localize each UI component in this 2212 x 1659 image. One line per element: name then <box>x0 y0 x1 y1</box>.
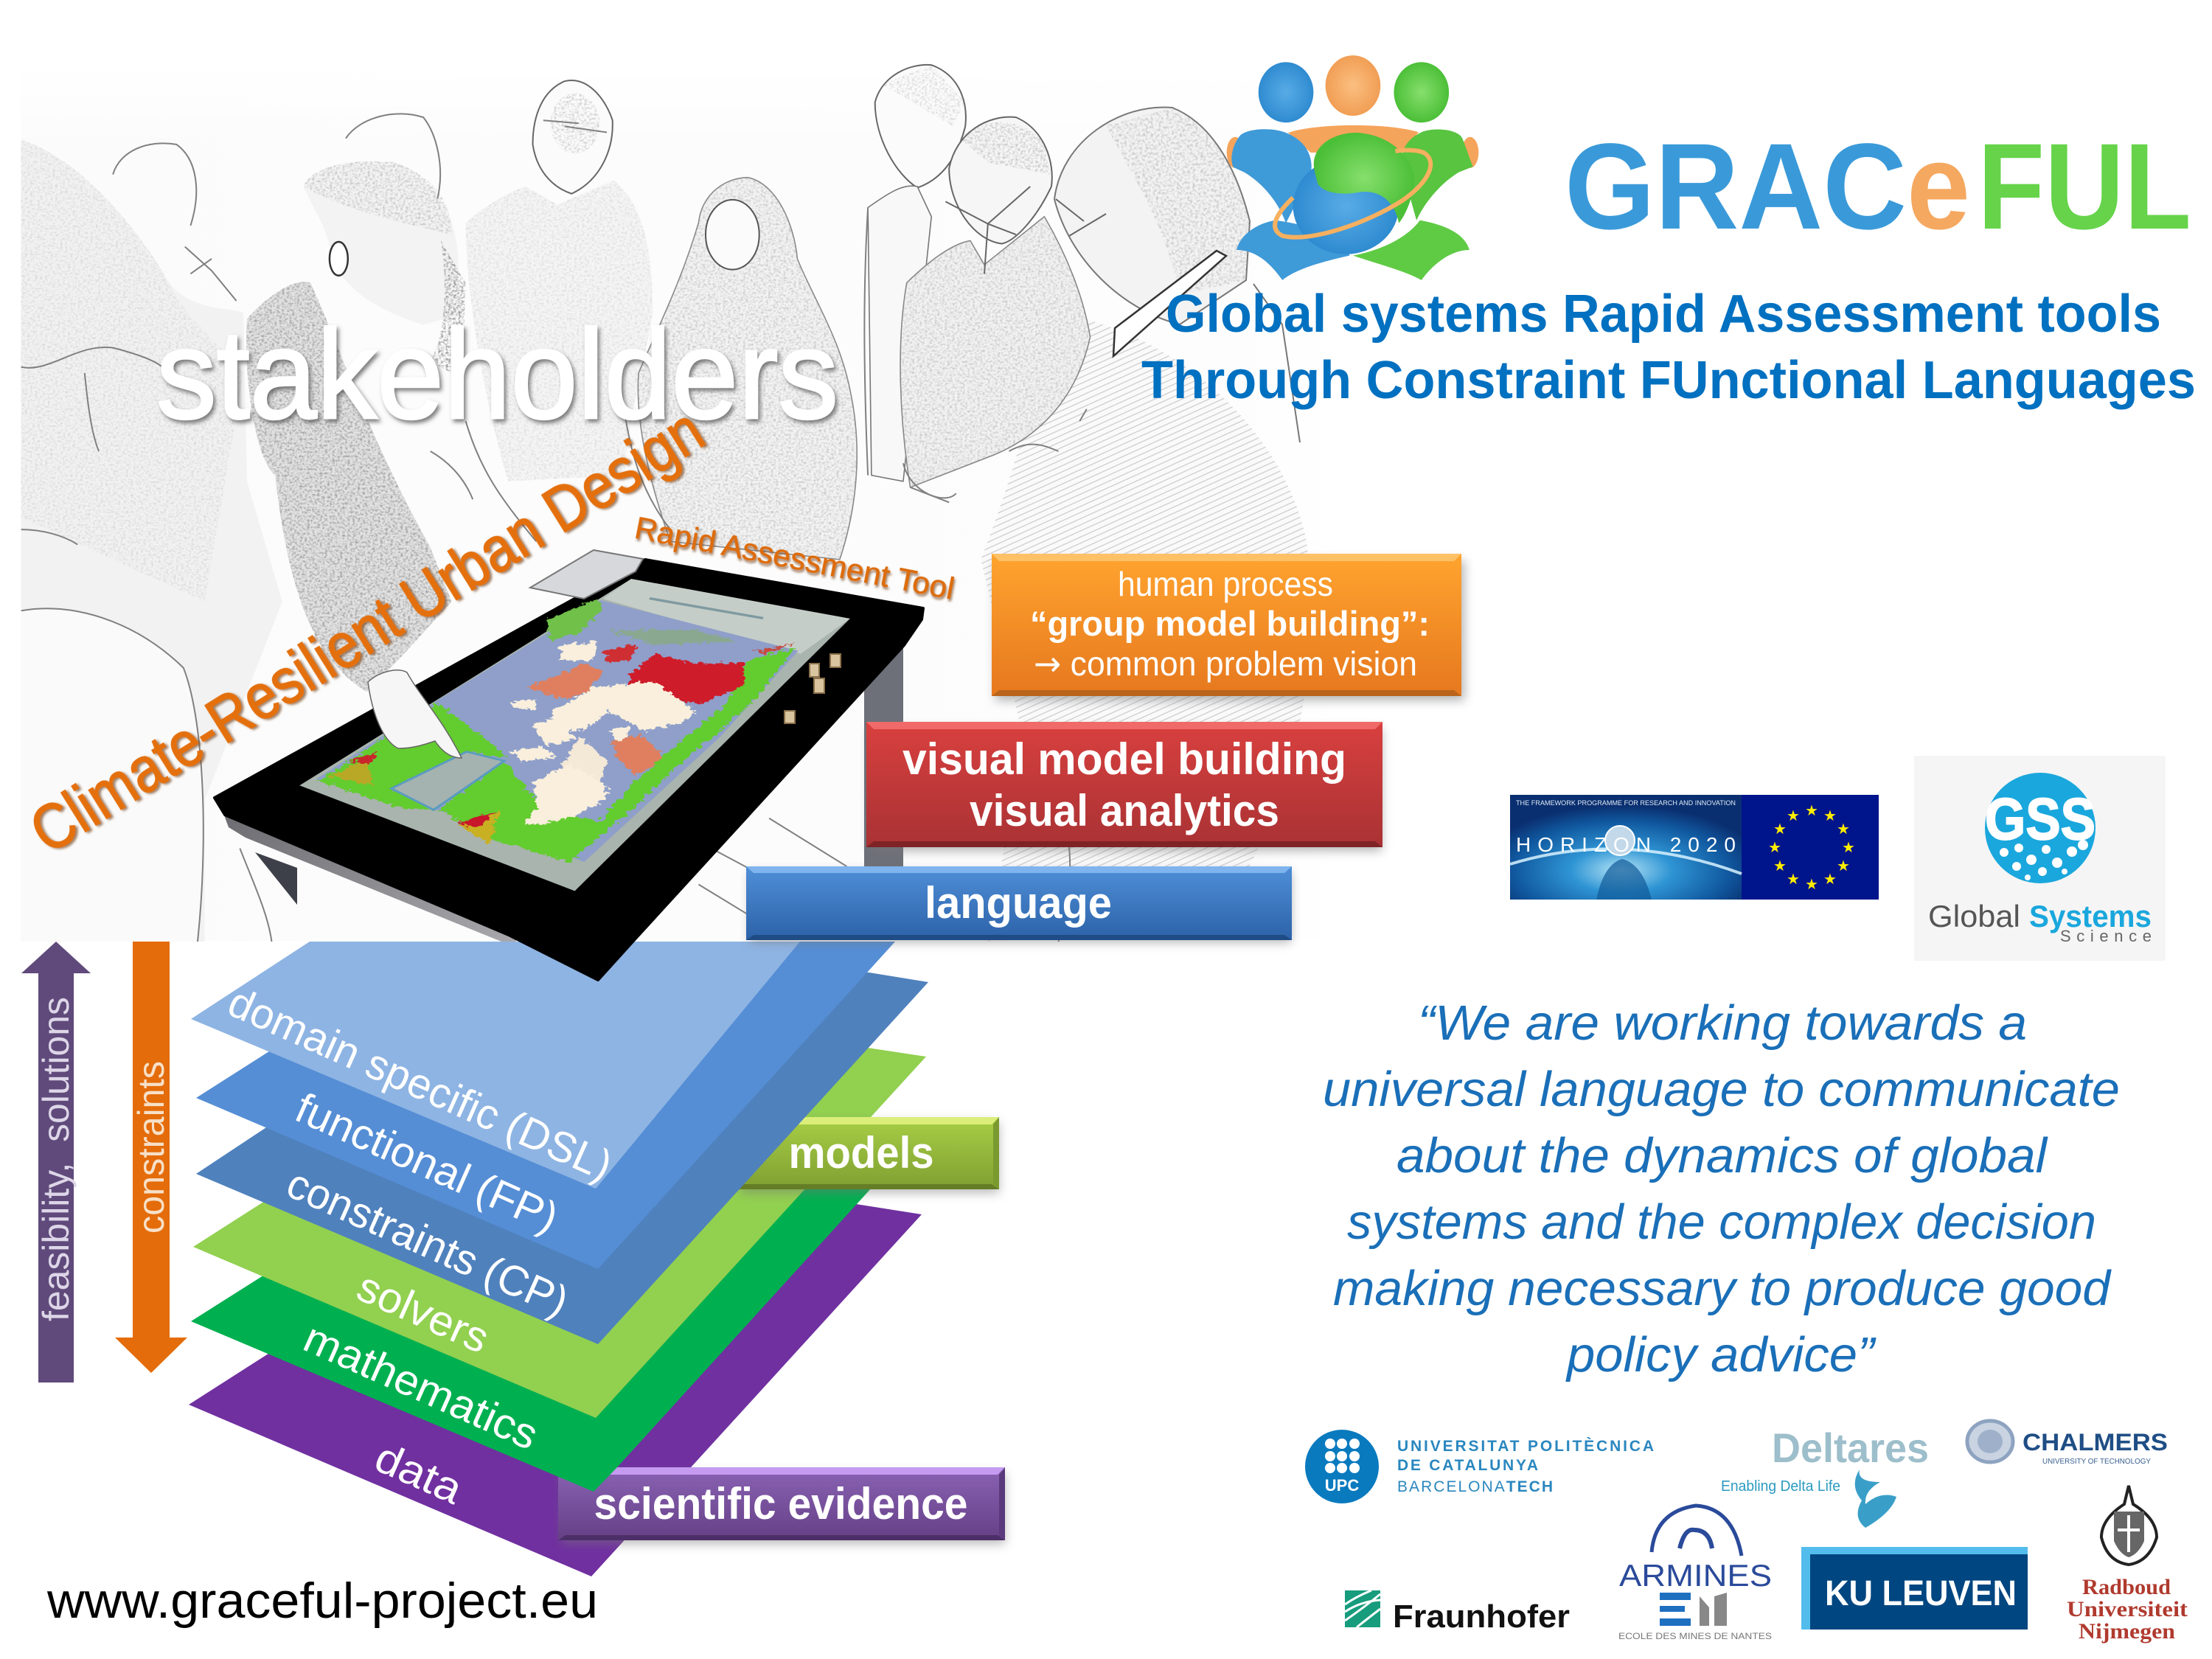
quote: universal language to communicate <box>1323 1062 2120 1117</box>
label: functional (FP): functional (FP) <box>288 1084 566 1242</box>
quote: systems and the complex decision <box>1347 1194 2096 1250</box>
label: data: data <box>368 1433 470 1514</box>
text: constraints: constraints <box>131 1061 172 1234</box>
text: visual model building: visual model building <box>902 734 1346 784</box>
heading: stakeholders: stakeholders <box>156 304 838 445</box>
text: group model building: “group model building”: <box>1030 604 1430 643</box>
photo: stakeholders pencil sketch background <box>21 65 1340 942</box>
layer: mathematics <box>191 1032 924 1492</box>
text: feasibility, solutions: feasibility, solutions <box>35 997 77 1321</box>
logo: Horizon 2020: ★ <box>1773 858 1787 874</box>
logo: Chalmers <box>1967 1421 2168 1466</box>
title <box>1141 285 2196 410</box>
logo: Horizon 2020: ★ <box>1787 872 1800 888</box>
label: solvers: solvers <box>350 1262 496 1363</box>
label: mathematics: mathematics <box>296 1313 545 1459</box>
text: models: models <box>789 1128 933 1178</box>
paper on table <box>530 550 643 599</box>
layer: solvers <box>193 995 926 1418</box>
layer: constraints <box>196 959 928 1344</box>
logo: Horizon 2020: ★ <box>1768 840 1781 856</box>
heading: Climate-Resilient Urban Design: Climate-Resilient Urban Design <box>18 394 716 867</box>
logo: Horizon 2020: ★ <box>1805 877 1818 893</box>
table top <box>215 560 923 980</box>
logo: Global Systems Science: GSS <box>1985 786 2096 852</box>
layer: domain specific <box>191 942 800 1189</box>
table with interactive map <box>215 550 923 980</box>
text: visual analytics: visual analytics <box>970 786 1279 835</box>
map screen <box>299 579 850 891</box>
logo: Radboud: Nijmegen <box>2079 1619 2175 1644</box>
logo: Global Systems Science: Science <box>2060 927 2152 945</box>
logo: UPC: UNIVERSITAT POLITÈCNICA <box>1397 1438 1654 1455</box>
logo: Horizon 2020: ★ <box>1773 821 1787 838</box>
logo: Global Systems Science: Global <box>1928 899 2020 933</box>
table silver edge <box>221 807 516 942</box>
logo: Horizon 2020 <box>1510 795 1879 900</box>
stack of language layers <box>189 942 1005 1576</box>
quote: “We are working towards a <box>1418 995 2027 1051</box>
box: human process <box>992 554 1464 700</box>
logo: Horizon 2020: ★ <box>1787 808 1800 824</box>
table left leg <box>255 852 297 905</box>
logo: Armines: ECOLE DES MINES DE NANTES <box>1618 1631 1772 1641</box>
logo: UPC <box>1305 1430 1654 1503</box>
title: Global systems Rapid Assessment tools <box>1166 285 2161 344</box>
logo: Deltares <box>1721 1425 1929 1528</box>
logo: Horizon 2020: ★ <box>1823 808 1837 824</box>
text: common problem vision: → common problem vision <box>1034 644 1417 684</box>
pointing hand <box>368 670 462 758</box>
logo: Global Systems Science <box>1914 756 2166 961</box>
text: human process: human process <box>1118 565 1333 603</box>
box: language <box>746 866 1292 942</box>
logo: Horizon 2020: HORIZON 2020 <box>1516 833 1736 856</box>
arrow: feasibility, solutions <box>21 942 91 1382</box>
box: visual model building <box>866 722 1382 851</box>
logo: Armines: ARMINES <box>1619 1558 1772 1593</box>
logo: Chalmers: UNIVERSITY OF TECHNOLOGY <box>2042 1458 2151 1466</box>
quote <box>1323 995 2120 1382</box>
logo: UPC: UPC <box>1325 1476 1359 1495</box>
logo wordmark: GRAC: GRAC <box>1565 119 1907 255</box>
logo: Fraunhofer: Fraunhofer <box>1393 1599 1570 1635</box>
logo: Horizon 2020: ★ <box>1805 803 1818 819</box>
logo: Armines <box>1618 1506 1772 1641</box>
quote: policy advice” <box>1565 1327 1877 1382</box>
layer: functional <box>196 942 895 1269</box>
logo wordmark: FUL: FUL <box>1978 119 2191 255</box>
logo: Fraunhofer <box>1345 1590 1570 1635</box>
logo: Horizon 2020: ★ <box>1823 872 1837 888</box>
logo: GRACeFUL emblem <box>1227 55 1478 280</box>
logo: UPC: BARCELONATECH <box>1397 1478 1553 1495</box>
quote: making necessary to produce good <box>1333 1261 2112 1316</box>
layer: data <box>189 1106 922 1576</box>
wooden cubes <box>785 654 841 723</box>
logo: KU Leuven <box>1801 1547 2028 1630</box>
logo: Chalmers: CHALMERS <box>2023 1429 2168 1455</box>
logo: Radboud: Radboud <box>2082 1575 2171 1599</box>
logo: Horizon 2020: ★ <box>1842 840 1855 856</box>
logo: UPC: DE CATALUNYA <box>1397 1457 1538 1474</box>
label: Rapid Assessment Tool: Rapid Assessment Tool <box>632 510 957 606</box>
logo: KU Leuven: KU LEUVEN <box>1825 1574 2017 1613</box>
box: scientific evidence <box>558 1467 1005 1544</box>
logo: Radboud <box>2067 1486 2188 1644</box>
logo: Horizon 2020: ★ <box>1837 821 1850 838</box>
quote: about the dynamics of global <box>1397 1128 2048 1183</box>
logo: Deltares: Deltares <box>1772 1425 1929 1471</box>
label: domain specific (DSL): domain specific (DSL) <box>221 978 619 1190</box>
logo: Radboud: Universiteit <box>2067 1597 2188 1621</box>
text: language: language <box>925 878 1112 928</box>
label: constraints (CP): constraints (CP) <box>279 1159 575 1326</box>
table right leg <box>864 634 903 866</box>
arrow: constraints <box>115 942 187 1373</box>
logo: Horizon 2020: ★ <box>1837 858 1850 874</box>
logo: Global Systems Science: Systems <box>2029 899 2152 933</box>
text: scientific evidence: scientific evidence <box>594 1479 967 1528</box>
website url: www.graceful-project.eu <box>46 1573 598 1629</box>
logo: Deltares: Enabling Delta Life <box>1721 1478 1840 1495</box>
logo wordmark: e: e <box>1907 119 1970 255</box>
title: Through Constraint FUnctional Languages <box>1141 351 2196 410</box>
logo: Horizon 2020: THE FRAMEWORK PROGRAMME FOR RESEARCH AND INNOVATION <box>1516 799 1736 807</box>
box: models <box>737 1117 999 1193</box>
